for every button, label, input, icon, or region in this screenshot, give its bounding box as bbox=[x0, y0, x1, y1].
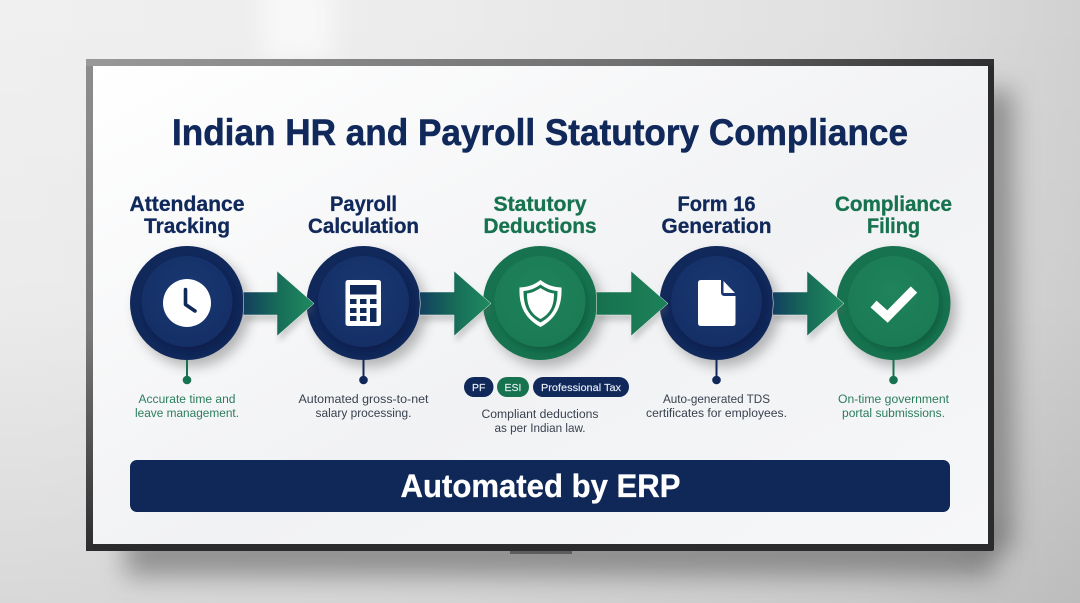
arrow: payroll to deductions bbox=[420, 271, 492, 342]
heading: Statutory bbox=[494, 193, 587, 216]
description: as per Indian law. bbox=[494, 421, 586, 435]
heading: Deductions bbox=[484, 215, 596, 238]
heading: Payroll bbox=[330, 193, 397, 216]
pill: PF: PF bbox=[472, 382, 485, 394]
title: Indian HR and Payroll Statutory Compliance bbox=[172, 112, 908, 153]
circle node bbox=[130, 246, 250, 367]
pill: Professional Tax bbox=[533, 377, 629, 397]
description: Automated gross-to-net bbox=[298, 392, 429, 406]
heading bbox=[662, 193, 772, 238]
heading bbox=[835, 193, 952, 238]
TV shadow bbox=[125, 90, 1013, 576]
TV display bbox=[86, 59, 994, 554]
pill: Professional Tax: Professional Tax bbox=[541, 382, 622, 394]
heading: Compliance bbox=[835, 193, 952, 216]
arrow: attendance to payroll bbox=[243, 271, 315, 342]
description bbox=[298, 392, 429, 420]
heading: Calculation bbox=[308, 215, 419, 238]
heading: Filing bbox=[867, 215, 920, 238]
circle node bbox=[306, 246, 426, 367]
step 5: compliance filing bbox=[835, 193, 956, 420]
description: certificates for employees. bbox=[646, 406, 787, 420]
icon: clock bbox=[163, 279, 211, 327]
description: leave management. bbox=[135, 406, 239, 420]
icon: checkmark bbox=[874, 290, 914, 316]
connector stem bbox=[183, 360, 191, 384]
banner: automated by ERP bbox=[130, 460, 950, 512]
step 4: form 16 generation bbox=[646, 193, 787, 420]
connector stem bbox=[359, 360, 368, 384]
heading: Generation bbox=[662, 215, 772, 238]
heading: Form 16 bbox=[678, 193, 756, 216]
TV bezel bbox=[86, 59, 994, 554]
step 1: attendance tracking bbox=[130, 193, 250, 420]
step 2: payroll calculation bbox=[298, 193, 429, 420]
heading bbox=[308, 193, 419, 238]
arrow: deductions to form 16 bbox=[596, 271, 669, 342]
pill: ESI bbox=[497, 377, 529, 397]
description: On-time government bbox=[838, 392, 950, 406]
heading: Attendance bbox=[130, 193, 244, 216]
screen panel bbox=[93, 66, 988, 544]
icon: calculator bbox=[346, 280, 381, 326]
tag pills bbox=[464, 377, 629, 397]
description bbox=[646, 392, 787, 420]
icon: document bbox=[698, 280, 736, 326]
description: salary processing. bbox=[316, 406, 412, 420]
circle node bbox=[483, 246, 603, 367]
description bbox=[482, 407, 598, 435]
arrow: form 16 to filing bbox=[772, 271, 845, 342]
description bbox=[135, 392, 239, 420]
pill: ESI: ESI bbox=[505, 382, 521, 394]
description: Auto-generated TDS bbox=[663, 392, 770, 406]
heading: Tracking bbox=[144, 215, 230, 238]
banner: automated by ERP: Automated by ERP bbox=[400, 468, 680, 504]
connector stem bbox=[889, 360, 898, 384]
description: portal submissions. bbox=[842, 406, 945, 420]
icon: shield bbox=[519, 280, 562, 327]
description: Compliant deductions bbox=[482, 407, 598, 421]
circle node bbox=[836, 246, 956, 367]
heading bbox=[130, 193, 244, 238]
heading bbox=[484, 193, 596, 238]
description: Accurate time and bbox=[138, 392, 236, 406]
circle node bbox=[660, 246, 780, 367]
pill: PF bbox=[464, 377, 494, 397]
description bbox=[838, 392, 950, 420]
connector stem bbox=[712, 360, 721, 384]
step 3: statutory deductions bbox=[464, 193, 629, 435]
